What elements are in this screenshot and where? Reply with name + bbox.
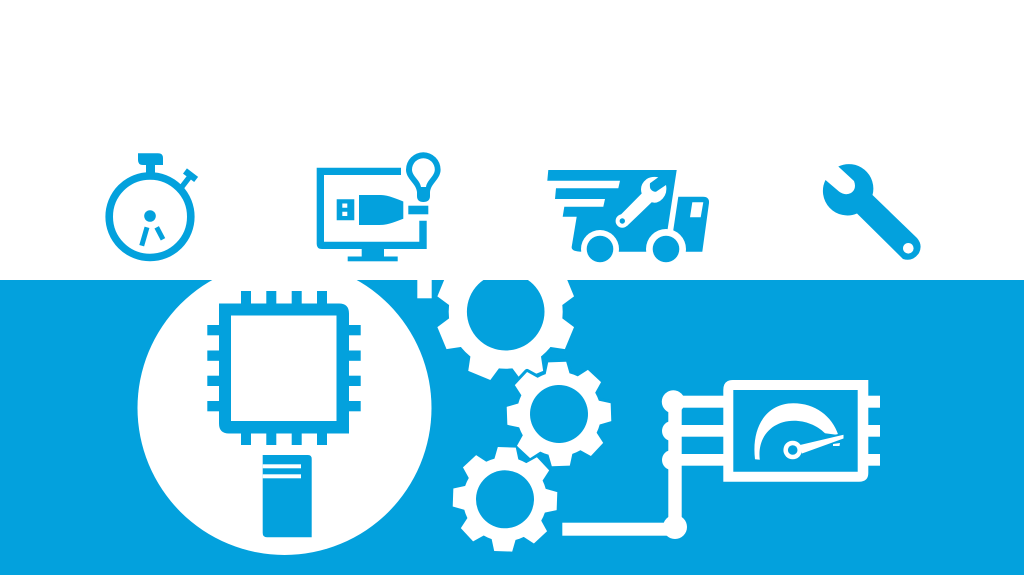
cable stub below monitor: [417, 280, 432, 298]
large white circle: [138, 261, 432, 555]
icon: wrench: [823, 164, 921, 260]
wrench on truck: [616, 177, 666, 228]
icon: stopwatch: [109, 153, 198, 258]
blue lower band: [0, 280, 1024, 575]
icon: server tower: [263, 455, 312, 537]
gear: middle: [505, 360, 613, 468]
gear: bottom: [451, 446, 559, 553]
white upper panel: [0, 0, 1024, 280]
icon: delivery truck with wrench: [547, 170, 710, 269]
gauge dial: [754, 403, 844, 460]
icon: processor chip: [207, 291, 361, 445]
gear: large top: [416, 222, 596, 402]
connector circuit lines: [562, 390, 725, 539]
speed gauge board: [723, 380, 880, 482]
icon: monitor with usb and bulb: [317, 152, 441, 261]
